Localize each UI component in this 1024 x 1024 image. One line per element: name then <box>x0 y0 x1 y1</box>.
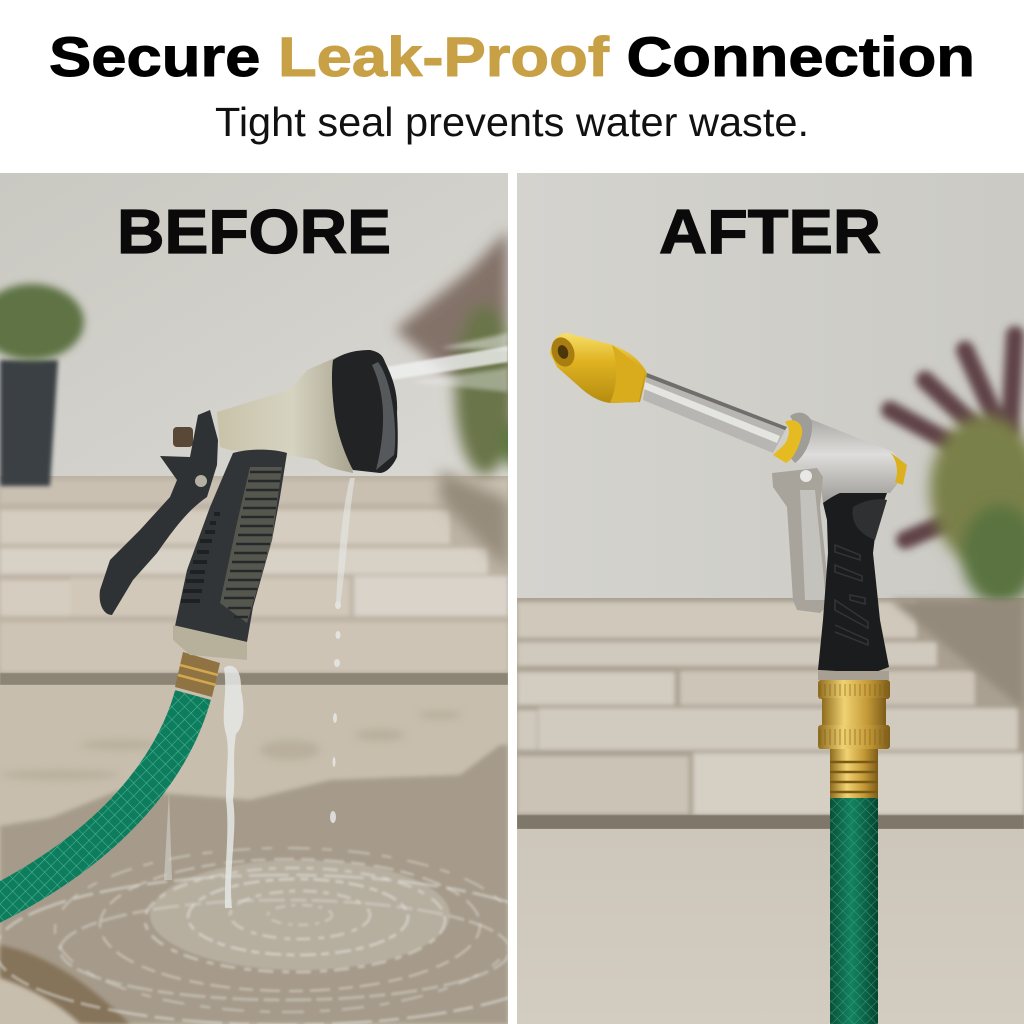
body <box>217 357 353 473</box>
paved ground <box>0 476 508 1024</box>
silver trigger <box>772 468 830 613</box>
old spray gun <box>100 350 398 660</box>
silver body <box>798 419 898 503</box>
water puddle ripples <box>0 846 508 1024</box>
trigger <box>100 410 218 615</box>
blurred plants right <box>390 228 508 568</box>
wall background <box>0 173 508 483</box>
black handle <box>818 493 889 673</box>
end cap <box>890 452 907 485</box>
metal ferrule <box>818 671 889 680</box>
gravel bed <box>890 600 1024 710</box>
nozzle dial <box>332 350 398 473</box>
handle <box>175 450 287 642</box>
rusty connector <box>175 652 220 697</box>
nozzle face <box>372 362 395 470</box>
before label: BEFORE <box>117 198 391 267</box>
wet concrete <box>0 745 508 1024</box>
new spray gun <box>548 333 907 680</box>
gold ring <box>773 420 802 463</box>
brass connector <box>818 680 890 798</box>
steel barrel <box>643 373 787 453</box>
subtitle: Tight seal prevents water waste. <box>215 99 809 145</box>
gold nozzle <box>550 333 647 403</box>
hose: green <box>0 695 193 912</box>
after label: AFTER <box>659 198 881 267</box>
panel: before <box>0 173 508 1024</box>
grip grooves <box>835 545 868 645</box>
blurred pot and plant left <box>0 284 84 486</box>
title: Secure Leak-Proof Connection <box>49 25 975 88</box>
speaker grip <box>853 499 887 540</box>
pot right <box>516 470 530 580</box>
water spray <box>380 333 508 392</box>
collar <box>173 625 247 660</box>
paved ground <box>517 598 1024 1024</box>
screw <box>173 427 193 447</box>
grip slots <box>181 514 220 601</box>
panel: after <box>517 173 1024 1024</box>
hose: green <box>830 797 878 1024</box>
silver ring <box>788 413 812 463</box>
grip ribs <box>220 467 282 623</box>
water leak streams <box>164 478 355 908</box>
blurred plants <box>890 335 1024 605</box>
rivet <box>195 475 207 487</box>
wall background <box>517 173 1024 603</box>
